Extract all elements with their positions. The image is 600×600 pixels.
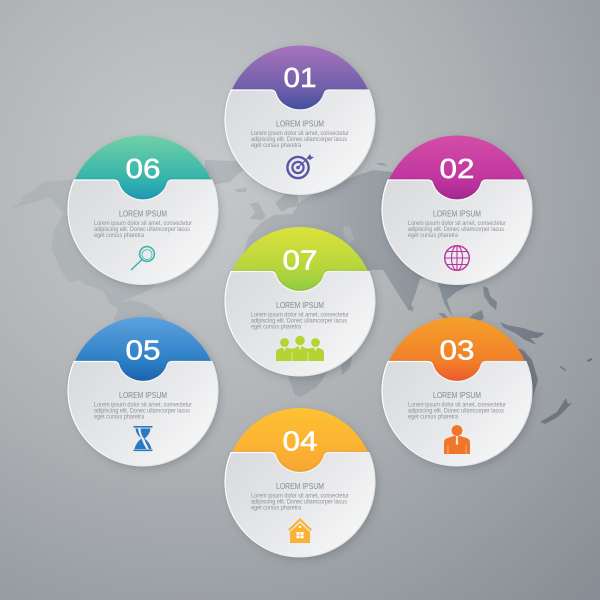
icon: business person [444,425,470,454]
icon: house [288,518,312,543]
card 04 text: eget cursus pharetra [251,504,301,512]
card 04 text: adipiscing elit. Donec ullamcorper lacus [251,498,347,506]
card 03 text [408,402,506,420]
card 06 body [68,180,218,284]
card 05 text: adipiscing elit. Donec ullamcorper lacus [94,408,190,414]
card 06 text: adipiscing elit. Donec ullamcorper lacus [94,226,190,233]
card 01 text [251,130,349,149]
card 04 number: 04 [282,426,318,456]
card 07 number: 07 [282,244,318,276]
card 07 heading: LOREM IPSUM [276,301,324,310]
card 03 heading: LOREM IPSUM [433,391,481,400]
card 03 number cap [382,317,532,466]
icon: globe [445,246,469,270]
card 01 number cap [226,46,374,194]
card 04 number cap [226,408,374,557]
card 01 [225,46,375,194]
card 06 heading: LOREM IPSUM [119,210,167,218]
card 02 text: adipiscing elit. Donec ullamcorper lacus [408,226,504,233]
card 03 text: Lorem ipsum dolor sit amet, consectetur [408,402,506,408]
card 07 text: adipiscing elit. Donec ullamcorper lacus [251,318,347,324]
card 04 text [251,492,349,512]
card 01 text: Lorem ipsum dolor sit amet, consectetur [251,130,349,137]
card 04 heading: LOREM IPSUM [276,482,324,491]
card 04 text: Lorem ipsum dolor sit amet, consectetur [251,492,349,500]
card 03 body [382,362,532,466]
card 05 heading: LOREM IPSUM [119,391,167,400]
card 02 text: eget cursus pharetra [408,232,458,239]
icon: team of three [276,336,324,361]
card 03 text: eget cursus pharetra [408,414,458,420]
card 07 text [251,312,349,330]
card 05 text [94,402,192,420]
card 01 heading: LOREM IPSUM [276,120,324,128]
card 02 heading: LOREM IPSUM [433,210,481,218]
icon: magnifying glass [131,247,154,270]
card 05 number cap [68,317,218,466]
card 01 text: adipiscing elit. Donec ullamcorper lacus [251,136,347,143]
icon: target [287,154,314,178]
card 02 number: 02 [440,153,474,184]
card 07 text: eget cursus pharetra [251,324,301,330]
card 01 body [225,90,375,194]
card 02 text: Lorem ipsum dolor sit amet, consectetur [408,220,506,227]
card 07 body [225,272,375,376]
card 03 text: adipiscing elit. Donec ullamcorper lacus [408,408,504,414]
card 04 body [225,452,375,557]
card 06 [68,136,218,284]
world map [8,160,592,424]
card 05 [68,317,218,466]
card 05 number: 05 [126,334,160,366]
card 02 body [382,180,532,284]
card 06 number cap [68,136,218,284]
card 06 number: 06 [126,153,160,184]
card 04 [225,408,375,557]
card 05 text: eget cursus pharetra [94,414,144,420]
icon: hourglass [134,426,152,451]
card 01 number: 01 [284,62,316,93]
card 02 text [408,220,506,239]
card 05 text: Lorem ipsum dolor sit amet, consectetur [94,402,192,408]
card 06 text: Lorem ipsum dolor sit amet, consectetur [94,220,192,227]
card 07 [225,227,375,376]
card 02 [382,136,532,284]
card 07 text: Lorem ipsum dolor sit amet, consectetur [251,312,349,318]
card 03 [382,317,532,466]
card 05 body [68,362,218,466]
card 06 text [94,220,192,239]
card 03 number: 03 [440,334,474,366]
card 06 text: eget cursus pharetra [94,232,144,239]
card 01 text: eget cursus pharetra [251,142,301,149]
card 02 number cap [382,136,532,284]
card 07 number cap [226,227,374,376]
